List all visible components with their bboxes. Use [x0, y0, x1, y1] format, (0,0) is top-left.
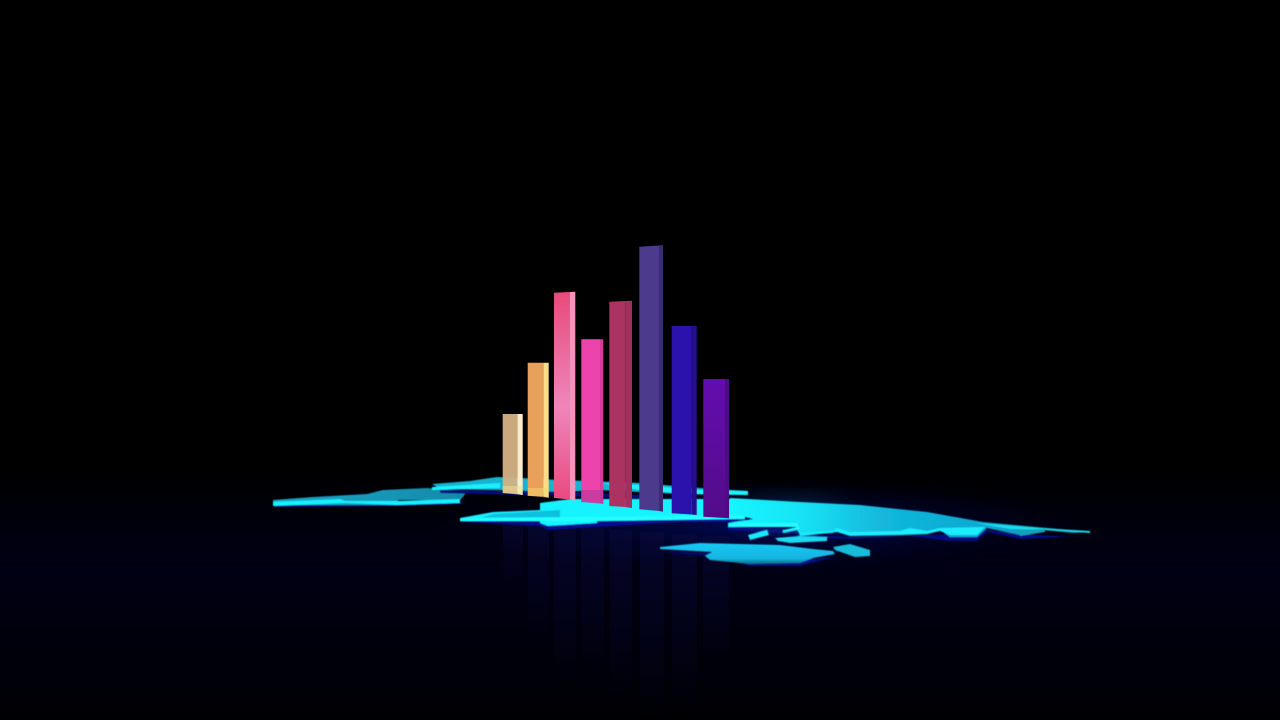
- continent: upper strip: [432, 477, 748, 498]
- world map: [273, 477, 1090, 566]
- bar 6: slate purple: [639, 245, 663, 512]
- continent: right landmass: [728, 498, 1090, 541]
- continent: central landmass: [460, 499, 745, 530]
- bar 3: light pink: [554, 292, 575, 501]
- bar 2: orange: [528, 363, 549, 498]
- map glow: [740, 504, 840, 520]
- bar 4: magenta: [581, 339, 603, 504]
- continent: Australia: [660, 543, 835, 566]
- floor gradient: [0, 470, 1280, 720]
- bar 8: violet: [703, 379, 729, 518]
- bar 1: cream: [503, 414, 523, 495]
- bar 7: indigo: [672, 326, 697, 515]
- bar reflections: [503, 522, 729, 720]
- islands: [748, 530, 870, 557]
- floor glow: [420, 477, 1100, 573]
- bar 5: crimson: [609, 301, 632, 508]
- bar chart: [503, 245, 729, 518]
- continent: left landmass: [273, 488, 468, 507]
